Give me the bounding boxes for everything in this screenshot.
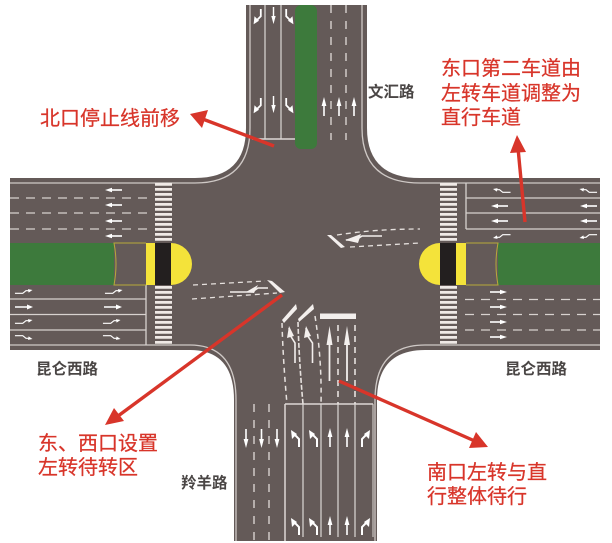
east approach: median and lane markings bbox=[465, 183, 600, 339]
west crosswalk bbox=[155, 183, 172, 345]
west approach: median and lane markings bbox=[10, 188, 148, 345]
callout: east-west waiting zone bbox=[38, 432, 158, 479]
callout: east-west waiting zone: 左转待转区 bbox=[38, 456, 138, 479]
north approach: median and lane markings bbox=[252, 5, 356, 149]
south approach: lane markings bbox=[244, 404, 373, 541]
road label: south: 羚羊路 bbox=[181, 473, 228, 492]
arrow: east-west waiting zone callout bbox=[105, 295, 282, 425]
callout: south waiting bbox=[427, 461, 547, 508]
west left-turn waiting zone bbox=[192, 280, 285, 299]
callout: north stop line: 北口停止线前移 bbox=[40, 107, 180, 130]
road label: north: 文汇路 bbox=[368, 82, 415, 101]
road label: west: 昆仑西路 bbox=[36, 359, 99, 378]
callout: south waiting: 行整体待行 bbox=[427, 485, 527, 508]
callout: east lane change: 左转车道调整为 bbox=[441, 82, 581, 105]
callout: south waiting: 南口左转与直 bbox=[427, 461, 547, 484]
south waiting area bbox=[282, 304, 356, 404]
road label: east: 昆仑西路 bbox=[505, 359, 568, 378]
arrow: north stop line callout bbox=[190, 110, 274, 146]
callout: east-west waiting zone: 东、西口设置 bbox=[38, 432, 158, 455]
east crosswalk bbox=[440, 183, 457, 345]
callout: east lane change: 东口第二车道由 bbox=[441, 57, 581, 80]
callout: east lane change bbox=[441, 57, 581, 129]
east median and refuge island bbox=[419, 243, 600, 285]
arrow: south waiting callout bbox=[339, 381, 488, 448]
west median and refuge island bbox=[10, 243, 192, 285]
callout: east lane change: 直行车道 bbox=[441, 106, 521, 129]
arrow: east lane callout bbox=[510, 135, 526, 222]
east left-turn waiting zone bbox=[327, 229, 420, 248]
